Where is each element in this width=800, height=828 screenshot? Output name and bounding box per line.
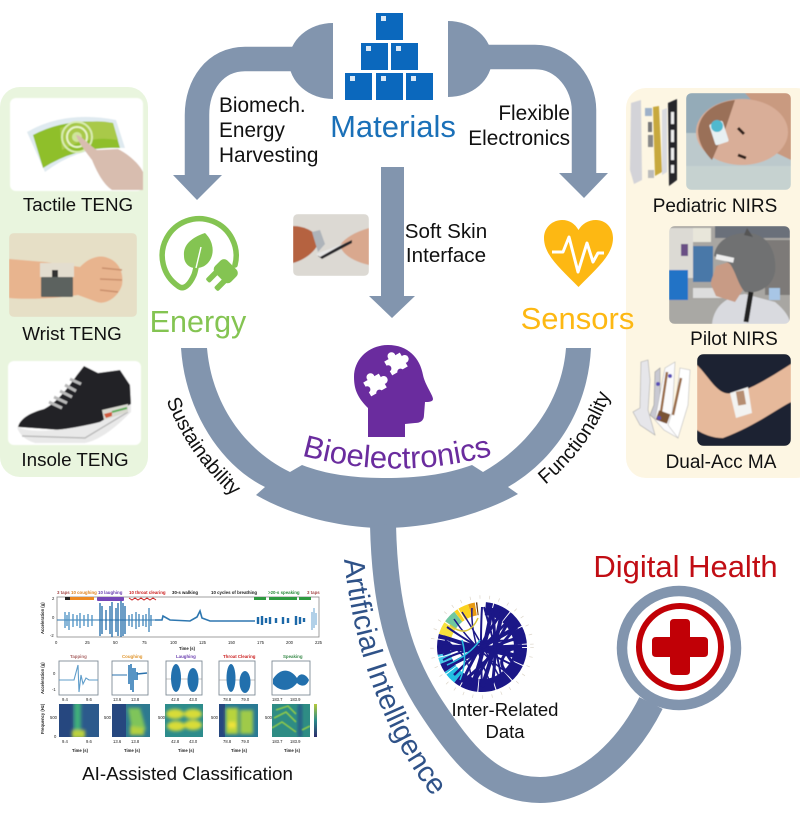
label: Pediatric NIRS: Pediatric NIRS xyxy=(653,196,777,217)
chart: spectrograms: 183.7 xyxy=(272,739,283,744)
panel: energy devices xyxy=(0,87,148,477)
chart: spectrograms: 13.6 xyxy=(113,739,122,744)
chart: spectrograms: Time (s) xyxy=(178,748,195,753)
chart: spectrograms: Time (s) xyxy=(72,748,89,753)
chart: spectrograms: 0 xyxy=(54,734,57,739)
chart: full acceleration timeline: 0 xyxy=(55,640,58,645)
chart: event waveforms: 13.6 xyxy=(113,697,122,702)
text: Flexible Electronics: Electronics xyxy=(468,127,570,150)
chart: event waveforms: -1 xyxy=(52,687,56,692)
chart: spectrograms: 42.8 xyxy=(171,739,180,744)
icon: heart with pulse xyxy=(544,220,613,287)
icon: digital health cross xyxy=(622,591,736,705)
chart: event waveforms: Speaking xyxy=(283,654,303,659)
label: Wrist TENG: Wrist TENG xyxy=(22,323,122,344)
photo: pilot with helmet xyxy=(669,226,790,324)
label: AI-Assisted Classification: AI-Assisted Classification xyxy=(82,763,293,784)
chart: event waveforms: 9.4 xyxy=(62,697,68,702)
chart: full acceleration timeline: 2 xyxy=(52,596,55,601)
chart: full acceleration timeline: 0 xyxy=(52,615,55,620)
label: Dual-Acc MA: Dual-Acc MA xyxy=(666,452,777,473)
chart: event waveforms: 79.0 xyxy=(241,697,250,702)
photo: arm with sensor xyxy=(697,354,791,446)
chart: event waveforms: 0 xyxy=(53,671,56,676)
chart: full acceleration timeline: 30-s walking xyxy=(172,590,198,595)
chart: full acceleration timeline: 75 xyxy=(142,640,147,645)
chart: spectrograms: 9.4 xyxy=(62,739,68,744)
chart: full acceleration timeline: Time (s) xyxy=(179,646,196,651)
panel: sensor devices xyxy=(626,88,800,478)
photo: infant with sensor xyxy=(686,93,791,190)
chart: AI-assisted classification xyxy=(40,590,323,784)
chart: full acceleration timeline: 175 xyxy=(257,640,265,645)
chart: full acceleration timeline: >20-s speaking xyxy=(268,590,300,595)
chart: full acceleration timeline: 100 xyxy=(170,640,178,645)
chart: spectrograms: Frequency (Hz) xyxy=(40,703,45,734)
text: Flexible Electronics: Flexible xyxy=(498,102,570,125)
text: Soft Skin Interface: Soft Skin xyxy=(405,220,487,243)
photo: tactile TENG xyxy=(10,98,143,191)
heading: Digital Health: Digital Health xyxy=(593,549,778,584)
label: Pilot NIRS: Pilot NIRS xyxy=(690,329,778,350)
chart: full acceleration timeline: 3 taps xyxy=(57,590,70,595)
chart: event waveforms: 43.0 xyxy=(189,697,198,702)
label: Artificial Intelligence: Artificial Intelligence xyxy=(344,560,442,794)
arc: convergence into bioelectronics xyxy=(181,348,591,528)
label: Functionality: Functionality xyxy=(538,390,612,484)
chart: full acceleration timeline: 10 cycles of breathing xyxy=(211,590,257,595)
chart: event waveforms: 183.7 xyxy=(272,697,283,702)
chart: full acceleration timeline: -2 xyxy=(50,633,54,638)
photo: wrist TENG xyxy=(9,233,137,317)
arrow: materials to energy xyxy=(173,23,333,200)
chart: spectrograms: 500 xyxy=(158,715,166,720)
chart: event waveforms xyxy=(40,654,310,702)
arrow: AI path to digital health xyxy=(383,525,651,790)
photo: insole TENG shoe xyxy=(8,361,141,445)
chart: event waveforms: 9.6 xyxy=(86,697,92,702)
label: Insole TENG: Insole TENG xyxy=(21,449,129,470)
chart: event waveforms: 78.8 xyxy=(223,697,232,702)
chart: full acceleration timeline: Acceleration (g) xyxy=(40,602,45,634)
chart: spectrograms: 78.8 xyxy=(223,739,232,744)
text: Biomech. Energy Harvesting: Harvesting xyxy=(219,144,318,167)
heading: Bioelectronics: Bioelectronics xyxy=(304,436,490,469)
chart: full acceleration timeline: 225 xyxy=(315,640,323,645)
chart: event waveforms: 42.8 xyxy=(171,697,180,702)
arrow: materials to sensors xyxy=(448,21,608,198)
chart: event waveforms: Tapping xyxy=(70,654,87,659)
chart: full acceleration timeline: 10 laughing xyxy=(98,590,123,595)
chart: full acceleration timeline: 150 xyxy=(228,640,236,645)
chart: full acceleration timeline: 200 xyxy=(286,640,294,645)
chart: spectrograms: Time (s) xyxy=(124,748,141,753)
chart: chord diagram xyxy=(428,593,536,701)
photo: soft skin interface xyxy=(293,214,369,276)
heading: Energy: Energy xyxy=(150,305,247,339)
chart: event waveforms: Acceleration (g) xyxy=(40,662,45,694)
icon: head with puzzle pieces xyxy=(354,345,433,437)
chart: full acceleration timeline: 10 coughing xyxy=(71,590,97,595)
chart: spectrograms: Time (s) xyxy=(284,748,301,753)
chart: spectrograms: 500 xyxy=(211,715,219,720)
icon: materials boxes xyxy=(345,13,433,100)
label: Tactile TENG: Tactile TENG xyxy=(23,194,133,215)
text: Biomech. Energy Harvesting: Biomech. xyxy=(219,94,306,117)
chart: spectrograms xyxy=(40,702,317,753)
chart: full acceleration timeline: 125 xyxy=(199,640,207,645)
text: Soft Skin Interface: Interface xyxy=(406,244,486,267)
chart: spectrograms: 43.0 xyxy=(189,739,198,744)
chart: event waveforms: Laughing xyxy=(176,654,196,659)
heading: Sensors: Sensors xyxy=(521,301,634,336)
chart: event waveforms: Coughing xyxy=(122,654,143,659)
label: Sustainability: Sustainability xyxy=(168,398,240,495)
chart: full acceleration timeline: 3 taps xyxy=(307,590,320,595)
chart: event waveforms: Throat Clearing xyxy=(223,654,256,659)
chart: spectrograms: 500 xyxy=(50,715,58,720)
chart: event waveforms: 13.8 xyxy=(131,697,140,702)
text: Inter-Related Data: Data xyxy=(485,721,525,742)
chart: spectrograms: 500 xyxy=(104,715,112,720)
text: Inter-Related Data: Inter-Related xyxy=(452,699,558,720)
chart: full acceleration timeline: 50 xyxy=(113,640,118,645)
chart: full acceleration timeline: 10 throat clearing xyxy=(129,590,166,595)
illustration: exploded dual accelerometer device xyxy=(633,360,690,438)
chart: spectrograms: 9.6 xyxy=(86,739,92,744)
chart: spectrograms: 183.9 xyxy=(290,739,301,744)
chart: spectrograms: Time (s) xyxy=(231,748,248,753)
chart: spectrograms: 500 xyxy=(265,715,273,720)
chart: event waveforms: 183.9 xyxy=(290,697,301,702)
text: Biomech. Energy Harvesting: Energy xyxy=(219,119,285,142)
chart: full acceleration timeline xyxy=(40,590,323,651)
illustration: exploded pediatric sensor xyxy=(630,99,677,186)
chart: spectrograms: 79.0 xyxy=(241,739,250,744)
chart: spectrograms: 13.8 xyxy=(131,739,140,744)
heading: Materials: Materials xyxy=(330,109,456,144)
chart: full acceleration timeline: 25 xyxy=(85,640,90,645)
icon: energy leaf and plug xyxy=(162,219,240,293)
arrow: materials to bioelectronics xyxy=(369,167,415,318)
